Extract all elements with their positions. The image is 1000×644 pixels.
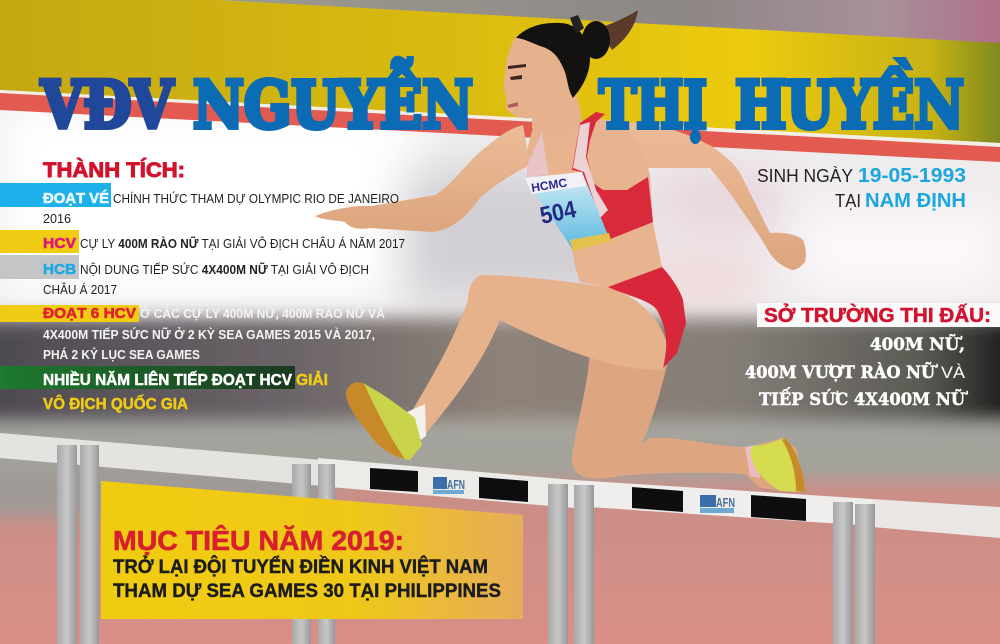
neck and face: [504, 30, 582, 139]
facial features: [507, 64, 526, 108]
left arm and pointing hand: [315, 125, 530, 232]
title word NGUYỄN: NGUYỄN: [193, 58, 473, 144]
achievement: Asian gold: CỰ LY 400M RÀO NỮ TẠI GIẢI VÔ ĐỊCH CHÂU Á NĂM 2017: [80, 236, 405, 251]
yellow band: [0, 0, 1000, 143]
achievement: national gold: GIẢI: [296, 370, 328, 389]
hurdle black panels: [370, 468, 806, 521]
hurdle sponsor logos: AFN: [716, 495, 735, 510]
goal panel: THAM DỰ SEA GAMES 30 TẠI PHILIPPINES: [113, 581, 501, 602]
birth info: TẠI: [835, 191, 861, 211]
birth info: 19-05-1993: [858, 165, 966, 187]
torso: [527, 120, 662, 287]
right arm and fist: [590, 117, 806, 270]
front sock: [407, 404, 426, 442]
ponytail and hair bun: [582, 10, 638, 59]
achievement: SEA Games: ĐOẠT 6 HCV: [43, 305, 136, 322]
achievement: Asian silver: HCB: [43, 261, 76, 278]
strengths list: 400M VƯỢT RÀO NỮ: [745, 361, 938, 383]
title word VĐV: VĐV: [40, 68, 174, 144]
achievement: Olympic ticket: ĐOẠT VÉ: [43, 190, 109, 207]
hurdle sponsor logos: AFN: [447, 477, 465, 492]
hurdles: [0, 433, 1000, 644]
race bib: [525, 172, 611, 251]
hair tie: [570, 15, 584, 34]
title word THỊ: THỊ: [599, 68, 707, 144]
athlete: [315, 10, 806, 492]
achievement: Olympic ticket: [0, 183, 399, 226]
hurdle posts: [57, 445, 875, 644]
strengths list: [745, 333, 968, 410]
strengths list: 400M NỮ,: [870, 333, 965, 355]
rear sock: [745, 445, 760, 478]
rear shoe sole: [782, 438, 805, 492]
strengths heading: SỞ TRƯỜNG THI ĐẤU:: [764, 303, 991, 327]
achievement: national gold: VÔ ĐỊCH QUỐC GIA: [43, 393, 188, 413]
hurdle bars: [0, 433, 1000, 538]
crop top red body: [572, 112, 653, 240]
front shoe: [346, 383, 422, 460]
crop top: [527, 112, 653, 240]
birth info: [757, 165, 966, 212]
achievement: Asian gold: [0, 230, 405, 253]
achievement: national gold: NHIỀU NĂM LIÊN TIẾP ĐOẠT HCV: [43, 370, 292, 389]
birth info: NAM ĐỊNH: [865, 190, 966, 212]
achievement: Asian silver: CHÂU Á 2017: [43, 282, 117, 297]
red shorts: [608, 267, 686, 368]
race bib: 504: [538, 196, 579, 230]
achievement: Olympic ticket: CHÍNH THỨC THAM DỰ OLYMPIC RIO DE JANEIRO: [113, 191, 399, 206]
strengths list: TIẾP SỨC 4X400M NỮ: [759, 387, 968, 410]
goal panel: [101, 481, 523, 619]
front thigh and shin: [408, 275, 667, 436]
achievements list: [0, 183, 405, 413]
rear leg: [572, 352, 805, 492]
achievement: SEA Games: Ở CÁC CỰ LY 400M NỮ, 400M RÀO NỮ VÀ: [140, 306, 386, 321]
white line and red track stripe: [0, 90, 1000, 162]
achievement: SEA Games: [0, 305, 386, 362]
achievement: national gold: [0, 366, 328, 413]
strengths list: VÀ: [941, 363, 966, 382]
shoe sole spikes: [346, 382, 405, 459]
crop top patterned strap: [573, 122, 608, 218]
hurdle sponsor logos: [433, 477, 735, 513]
goal panel: MỤC TIÊU NĂM 2019:: [113, 525, 404, 556]
achievement: Olympic ticket: 2016: [43, 211, 71, 226]
birth info: SINH NGÀY: [757, 166, 853, 186]
race bib: HCMC: [530, 175, 568, 195]
achievement: SEA Games: PHÁ 2 KỶ LỤC SEA GAMES: [43, 347, 200, 362]
top grey band: [217, 0, 1000, 44]
crop top left strap: [527, 132, 549, 178]
title: [40, 58, 964, 144]
achievement: Asian silver: [0, 255, 369, 297]
achievement: Asian silver: NỘI DUNG TIẾP SỨC 4X400M NỮ TẠI GIẢI VÔ ĐỊCH: [80, 262, 369, 277]
achievement: Asian gold: HCV: [43, 235, 76, 252]
hair: [516, 23, 590, 98]
achievement: SEA Games: 4X400M TIẾP SỨC NỮ Ở 2 KỲ SEA GAMES 2015 VÀ 2017,: [43, 327, 375, 342]
goal panel: TRỞ LẠI ĐỘI TUYỂN ĐIỀN KINH VIỆT NAM: [113, 556, 488, 578]
rear shoe: [750, 438, 805, 492]
achievements heading: THÀNH TÍCH:: [43, 159, 185, 182]
